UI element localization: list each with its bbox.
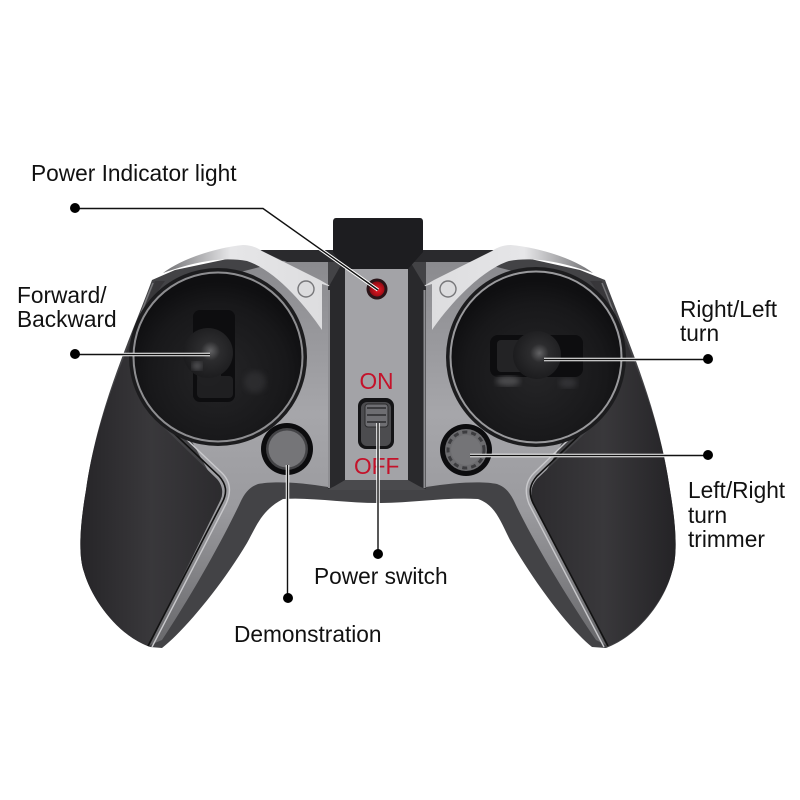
- right silver wing: [422, 245, 593, 330]
- power indicator LED: [366, 278, 388, 300]
- top tab: [333, 218, 423, 269]
- label: left/right turn trimmer: turn: [688, 502, 727, 528]
- ON label: ON: [360, 368, 394, 394]
- power switch: [358, 398, 394, 449]
- centre grey plate: [345, 269, 408, 480]
- demonstration button: [261, 423, 313, 475]
- label: left/right turn trimmer: Left/Right: [688, 477, 786, 503]
- label: power switch: Power switch: [314, 563, 448, 589]
- label: left/right turn trimmer: [688, 477, 786, 552]
- leader: demonstration: [283, 465, 293, 603]
- OFF label: OFF: [354, 453, 399, 479]
- label: right/left turn: turn: [680, 320, 719, 346]
- grey plate left: [150, 260, 328, 645]
- trimmer knob: [440, 424, 492, 476]
- label: demonstration: Demonstration: [234, 621, 382, 647]
- leader: power switch: [373, 423, 383, 559]
- label: forward/backward: Forward/: [17, 282, 107, 308]
- top dark bar: [258, 250, 500, 262]
- label: forward/backward: Backward: [17, 306, 117, 332]
- leader: power indicator: [70, 203, 378, 290]
- leader: trimmer: [470, 450, 713, 460]
- label: forward/backward: [17, 282, 117, 332]
- label: left/right turn trimmer: trimmer: [688, 526, 765, 552]
- leader: right/left turn: [544, 354, 713, 364]
- body silhouette: [80, 250, 676, 648]
- centre dark columns: [328, 258, 426, 489]
- controller body: [80, 218, 676, 648]
- left stick slot: [193, 310, 235, 402]
- label: right/left turn: Right/Left: [680, 296, 778, 322]
- right stick slot: [490, 335, 583, 377]
- left joystick: [129, 268, 307, 446]
- label: right/left turn: [680, 296, 778, 346]
- right joystick: [446, 267, 626, 447]
- left stick ball: [183, 328, 233, 386]
- right stick ball: [513, 331, 561, 379]
- grey plate right: [426, 260, 606, 645]
- label: power indicator light: Power Indicator light: [31, 160, 237, 186]
- centre bottom bevel: [328, 480, 426, 490]
- leader: forward/backward: [70, 349, 210, 359]
- left grip panel: [80, 281, 229, 647]
- left silver wing: [163, 245, 332, 330]
- right grip panel: [526, 281, 676, 647]
- column rim lines: [329, 290, 424, 488]
